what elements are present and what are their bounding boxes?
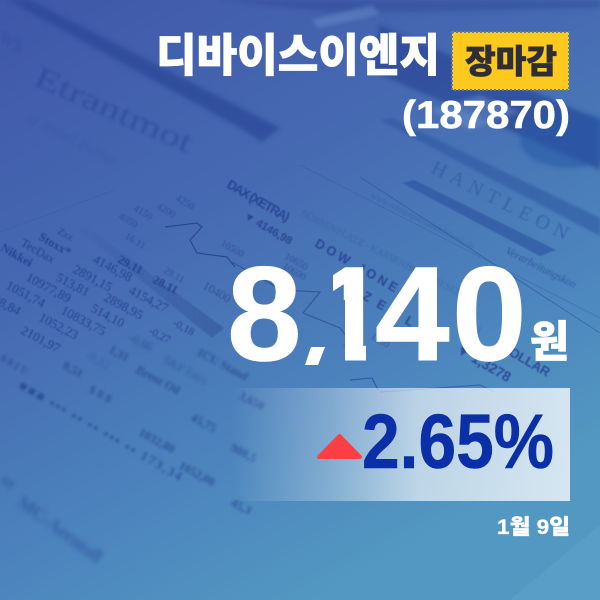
title: company name: 디바이스이엔지 xyxy=(156,30,440,81)
price unit: 원 xyxy=(530,319,569,367)
photo: blurred lower table xyxy=(0,330,267,518)
price value: 40 xyxy=(375,240,527,389)
photo: index headings: ▼ ZELL xyxy=(332,272,417,330)
badge: market close xyxy=(452,32,569,90)
photo: stock table: 2891,15 xyxy=(71,261,115,294)
photo: stock table: 10833,75 xyxy=(59,302,109,339)
photo: Hantleon masthead: HANTLEON xyxy=(428,157,577,248)
photo: stock table: -0,18 xyxy=(171,317,197,339)
photo: bottom right paper corner xyxy=(510,525,600,600)
photo: chart axis labels: 10400 xyxy=(200,278,233,306)
photo: Hantleon masthead: BÖRSENPLATZ · KASSENHUSS DIESEL xyxy=(299,207,464,299)
photo: chart axis labels: 4150 xyxy=(132,203,154,223)
photo: stock table: 1052,23 xyxy=(37,309,81,342)
photo: stock table: Stoxx* xyxy=(36,229,74,259)
photo: chart axis labels: 29.11 xyxy=(162,265,186,286)
photo: stock table: 4146,98 xyxy=(91,251,135,284)
photo: blurred lower table: Brent Oil xyxy=(134,362,183,398)
photo: stock table: 2898,95 xyxy=(102,289,146,322)
photo: stock table: 2101,97 xyxy=(19,322,63,356)
photo: blurred lower table: 1032,80 xyxy=(137,425,178,456)
photo: Hantleon masthead: 21 xyxy=(469,322,484,338)
photo: stock table: 29.11 xyxy=(116,252,145,277)
photo: chart axis labels: 1350 xyxy=(368,331,391,351)
photo: chart axis labels: 10600 xyxy=(280,261,308,283)
panel: change rate xyxy=(230,388,570,501)
icon: red up triangle xyxy=(319,436,360,457)
photo: Hantleon masthead: www.wertpapierhandelsbank.de xyxy=(369,190,476,251)
photo: blurred lower table: 1,31 xyxy=(107,342,132,365)
photo: chart axis labels xyxy=(116,193,391,358)
photo: blurred lower table: 980,5 xyxy=(229,440,259,465)
photo: line charts xyxy=(165,223,495,392)
photo: blurred lower table: 1052,00 xyxy=(177,458,218,489)
photo: stock table: Zxx xyxy=(56,226,75,244)
photo: index headings: DAX (XETRA) xyxy=(224,177,293,225)
photo: index headings: DOW JONES xyxy=(312,236,411,301)
price value: 8 xyxy=(227,240,302,389)
photo: stock table: 513,81 xyxy=(54,269,92,299)
photo: stock table: 1051,74 xyxy=(4,277,48,311)
photo: stock table: 10977,89 xyxy=(24,269,74,306)
photo: chart axis labels: 4050 xyxy=(116,211,139,231)
photo: blurred bottom left text xyxy=(0,471,106,568)
photo: stock table: 514,10 xyxy=(89,300,127,330)
photo: blurred lower table: $ 0 8 xyxy=(87,382,114,406)
date: 1월 9일 xyxy=(497,516,570,539)
photo: lighter blurred top pills xyxy=(312,5,520,130)
price value xyxy=(230,266,522,365)
price value: 1 xyxy=(313,240,388,389)
photo: dark blurred top shapes xyxy=(8,0,600,170)
change percentage: 2.65% xyxy=(362,399,554,485)
photo: right document bands xyxy=(380,118,600,256)
photo: chart axis labels: 4200 xyxy=(154,201,177,221)
photo: index headings xyxy=(224,177,553,385)
photo: index headings: ▼ 4146,98 xyxy=(242,210,294,247)
photo: stock table: -0,27 xyxy=(147,325,173,347)
photo: blurred lower table: -0,06 xyxy=(127,330,155,354)
photo: blurred lower table: 0,51 xyxy=(61,358,86,381)
stock code: (187870) xyxy=(402,94,570,137)
photo: headline: of Nobel Dollar xyxy=(24,109,120,168)
photo: Hantleon masthead xyxy=(299,157,579,338)
badge: market close: 장마감 xyxy=(465,43,557,80)
photo: stock table xyxy=(0,226,197,356)
photo: chart axis labels: 1380 xyxy=(340,338,363,358)
photo: rules xyxy=(0,165,600,333)
photo: index headings: ▼ 1,3278 xyxy=(454,341,514,385)
photo: chart axis labels: 10650 xyxy=(282,251,310,273)
photo: index headings: DOLLAR xyxy=(498,340,553,380)
photo: table header band xyxy=(77,228,224,338)
photo: blurred lower table: 45,3 xyxy=(229,495,254,518)
photo: chart axis labels: 16.11 xyxy=(122,231,147,252)
photo: blurred lower table: S&P Euro xyxy=(161,352,210,387)
photo: stock table: TecDax xyxy=(18,235,58,266)
photo: headline: Etrantmot xyxy=(29,60,199,160)
photo: blurred lower table: 45,75 xyxy=(189,410,219,435)
photo: stock table: 28.11 xyxy=(151,272,180,297)
photo: blurred lower table: ■■■ ▪▪▪ ▪▪ ▪▪ ▪▪▪ ▪▪ 173,34 xyxy=(16,378,187,485)
photo: blurred lower table: 3,650 xyxy=(237,388,267,413)
photo: chart axis labels: 4250 xyxy=(174,193,196,213)
price value: , xyxy=(290,212,337,402)
photo: Hantleon masthead: Verarbeitungskon xyxy=(504,245,579,291)
photo: blurred bottom left text: MC-Aerntoll xyxy=(13,492,106,568)
photo: chart axis labels: 10500 xyxy=(218,238,246,260)
photo: blurred lower table: ICU Stand xyxy=(196,345,251,384)
photo: stock table: 4154,27 xyxy=(127,282,171,316)
photo: blurred lower table: -0,32 xyxy=(84,348,112,372)
photo: headline xyxy=(0,23,199,168)
